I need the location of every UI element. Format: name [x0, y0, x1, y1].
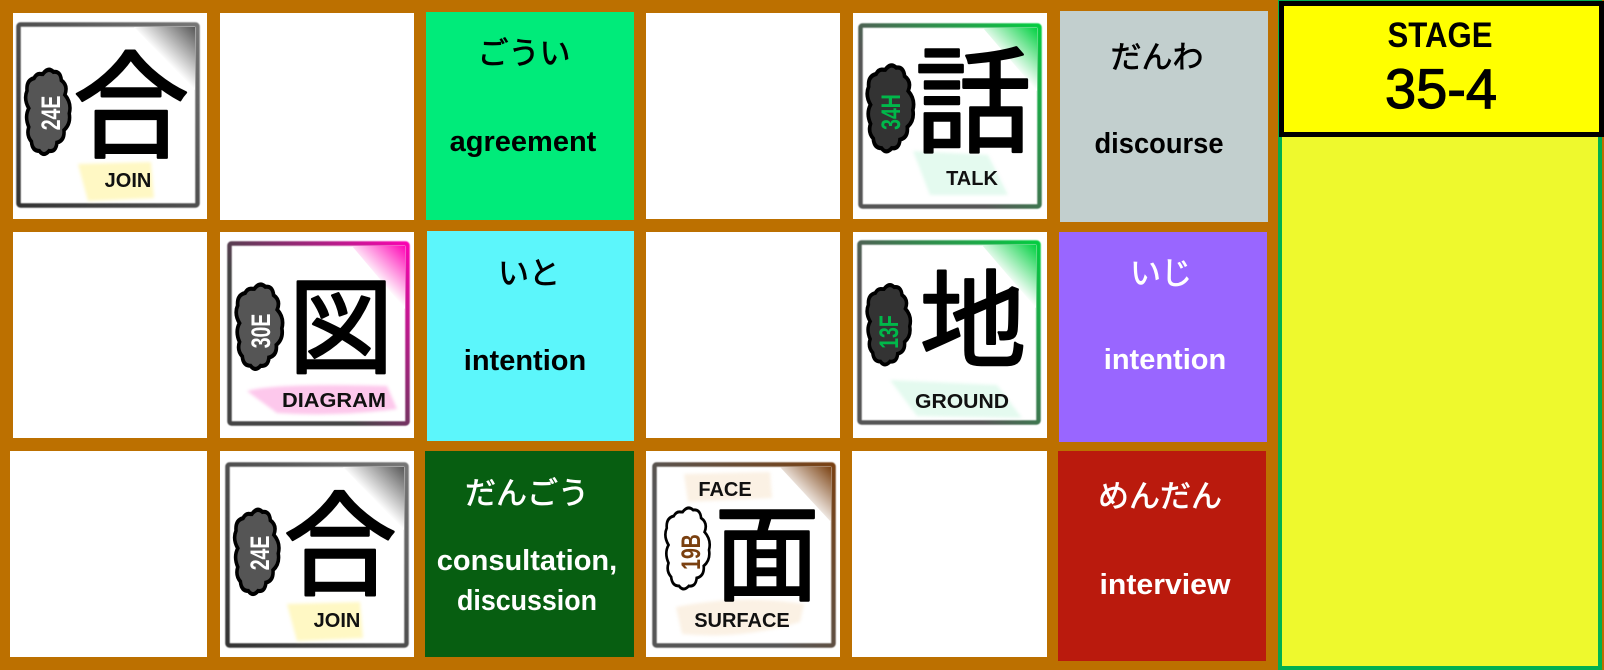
row 2 column 5: kanji card 地: GROUND — [915, 391, 1009, 413]
row 1 column 6: vocabulary card だんわ: discourse — [1094, 128, 1224, 160]
stage badge: 35-4 — [1385, 57, 1497, 120]
row 1 column 3: vocabulary card ごうい — [426, 12, 634, 220]
row 1 column 6: vocabulary card だんわ — [1060, 11, 1268, 222]
row 1 column 1: kanji card 合: 24E — [36, 96, 66, 130]
row 1 column 3: vocabulary card ごうい: ごうい — [478, 28, 570, 73]
row 2 column 2: kanji card 図: DIAGRAM — [282, 390, 386, 412]
row 3 column 4: kanji card 面: SURFACE — [694, 610, 790, 632]
row 3 column 4: kanji card 面: FACE — [698, 479, 752, 501]
row 1 column 3: vocabulary card ごうい: agreement — [450, 126, 597, 158]
side panel — [1280, 1, 1600, 668]
row 1 column 1: kanji card 合: 合 — [73, 14, 189, 182]
row 2 column 2: kanji card 図 — [220, 232, 414, 438]
row 2 column 6: vocabulary card いじ: intention — [1104, 344, 1226, 376]
row 1 column 6: vocabulary card だんわ: だんわ — [1110, 32, 1204, 77]
row 3 column 2: kanji card 合: 24E — [245, 536, 275, 570]
row 1 column 5: kanji card 話: 話 — [915, 9, 1031, 177]
row 3 column 4: kanji card 面: 面 — [714, 471, 820, 623]
row 3 column 3: vocabulary card だんごう: だんごう — [465, 468, 589, 513]
row 2 column 2: kanji card 図: 図 — [288, 244, 394, 396]
row 2 column 5: kanji card 地 — [853, 232, 1047, 438]
row 1 column 1: kanji card 合 — [13, 13, 207, 219]
stage badge: STAGE — [1388, 16, 1492, 55]
row 3 column 4: kanji card 面 — [646, 451, 840, 657]
row 3 column 6: vocabulary card めんだん: interview — [1100, 569, 1231, 601]
row 3 column 5: blank card — [852, 451, 1047, 657]
row 2 column 3: vocabulary card いと: intention — [464, 345, 586, 377]
row 1 column 5: kanji card 話: TALK — [946, 168, 998, 190]
background board — [0, 0, 1278, 670]
row 2 column 6: vocabulary card いじ: いじ — [1130, 248, 1192, 293]
row 3 column 3: vocabulary card だんごう — [425, 451, 634, 657]
row 3 column 6: vocabulary card めんだん — [1058, 451, 1266, 661]
row 1 column 5: kanji card 話 — [853, 9, 1047, 219]
row 3 column 2: kanji card 合 — [220, 451, 414, 657]
row 3 column 2: kanji card 合: 合 — [284, 455, 396, 619]
row 3 column 3: vocabulary card だんごう: consultation, — [437, 545, 617, 577]
row 3 column 1: blank card — [10, 451, 207, 657]
row 2 column 6: vocabulary card いじ — [1059, 232, 1267, 442]
row 1 column 1: kanji card 合: JOIN — [105, 170, 151, 192]
row 2 column 4: blank card — [646, 232, 840, 438]
row 2 column 3: vocabulary card いと — [427, 231, 634, 441]
row 2 column 5: kanji card 地: 13F — [874, 315, 904, 349]
row 2 column 1: blank card — [13, 232, 207, 438]
row 3 column 6: vocabulary card めんだん: めんだん — [1098, 471, 1222, 516]
row 3 column 4: kanji card 面: 19B — [676, 534, 706, 570]
row 2 column 5: kanji card 地: 地 — [920, 236, 1026, 390]
stage badge — [1282, 4, 1602, 134]
row 1 column 5: kanji card 話: 34H — [876, 94, 906, 130]
row 2 column 2: kanji card 図: 30E — [246, 314, 276, 348]
row 1 column 2: blank card — [220, 13, 414, 220]
row 2 column 3: vocabulary card いと: いと — [498, 248, 560, 293]
row 3 column 2: kanji card 合: JOIN — [314, 610, 360, 632]
row 1 column 4: blank card — [646, 13, 840, 219]
row 3 column 3: vocabulary card だんごう: discussion — [457, 585, 597, 617]
